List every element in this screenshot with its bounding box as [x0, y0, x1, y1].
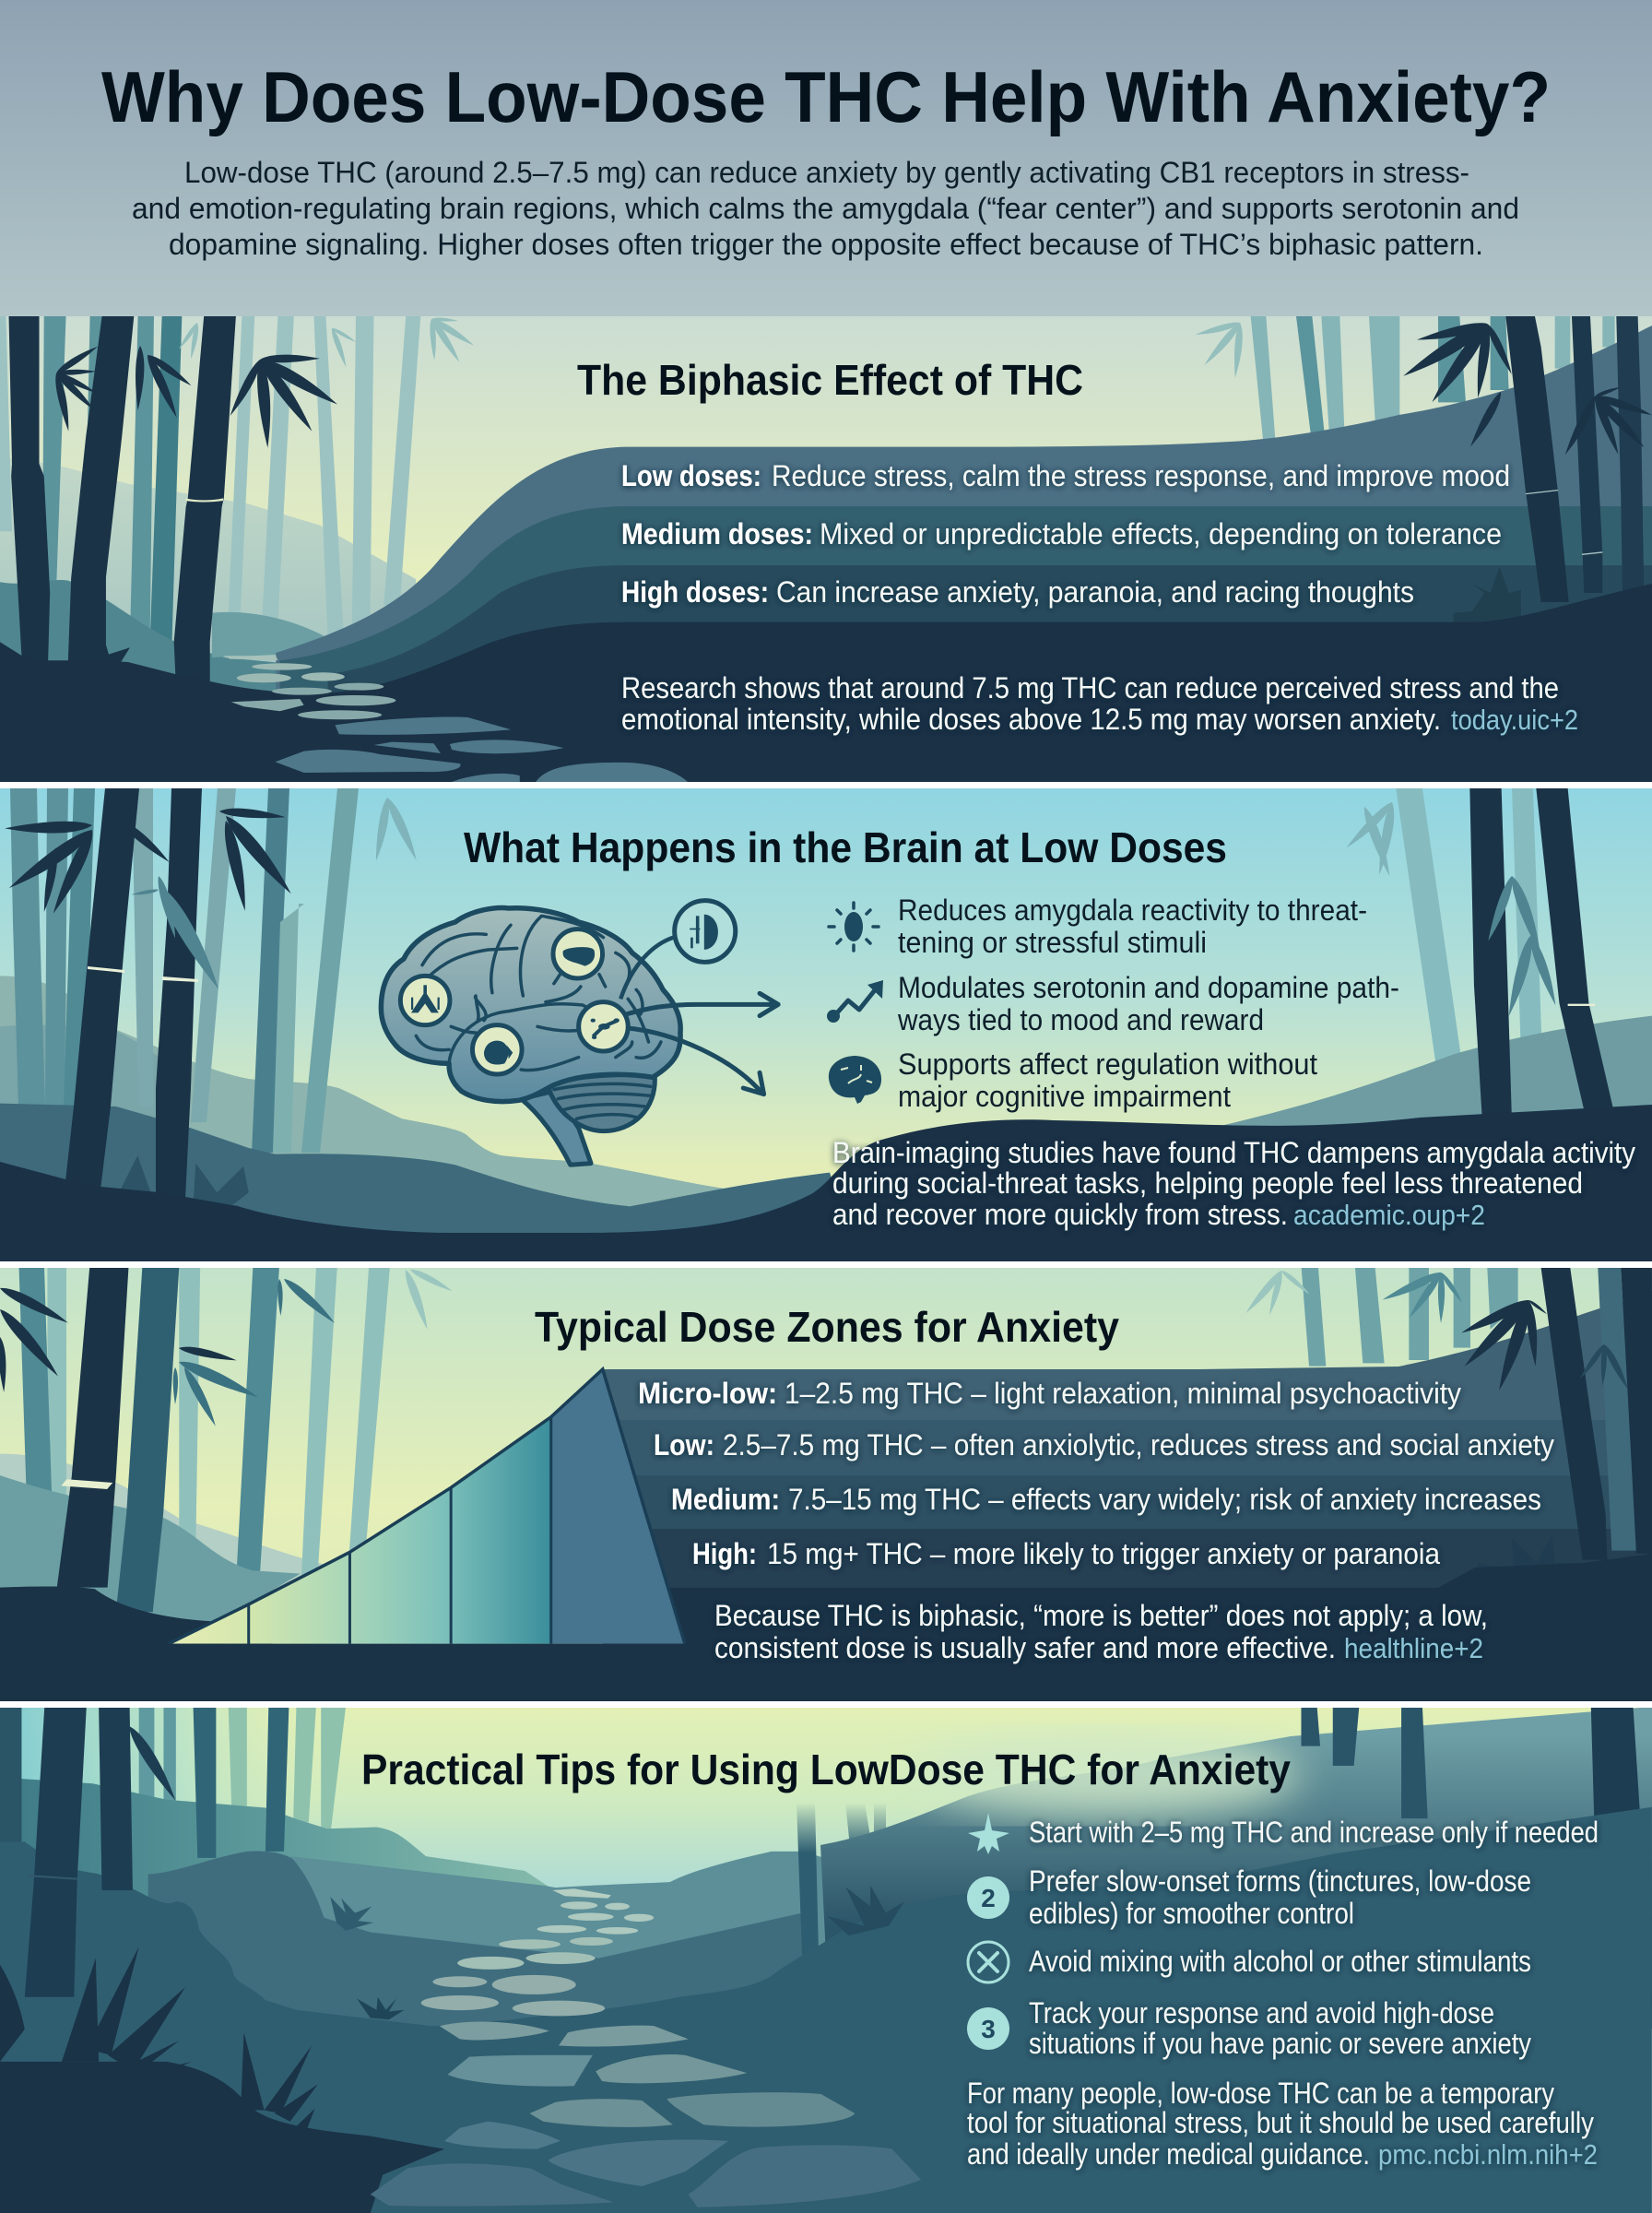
tips list: situations if you have panic or severe anxiety — [1029, 2027, 1531, 2060]
tips list: Avoid mixing with alcohol or other stimulants — [1029, 1945, 1531, 1978]
bamboo leaves — [0, 1275, 1631, 1427]
panel: biphasic effect — [0, 316, 1652, 782]
bamboo leaf — [124, 1722, 181, 1803]
dose zone list: 1–2.5 mg THC – light relaxation, minimal psychoactivity — [785, 1377, 1461, 1410]
tips list: Track your response and avoid high-dose — [1029, 1996, 1494, 2030]
intro text: dopamine signaling. Higher doses often trigger the opposite effect because of THC’s biphasic pattern. — [169, 228, 1483, 261]
icon: region markers — [400, 901, 736, 1074]
closing note: pmc.ncbi.nlm.nih+2 — [1378, 2138, 1598, 2171]
panel: dose zones — [0, 1267, 1652, 1705]
dose list: Low doses: — [621, 459, 761, 492]
icon: x mark — [968, 1942, 1009, 1982]
research note: academic.oup+2 — [1293, 1199, 1485, 1231]
dose list: Mixed or unpredictable effects, depending on tolerance — [820, 517, 1502, 550]
section heading: The Biphasic Effect of THC — [577, 356, 1083, 404]
bullet list: Reduces amygdala reactivity to threat- — [898, 893, 1367, 927]
dose list: High doses: — [621, 575, 769, 609]
note — [714, 1599, 1488, 1664]
dose zone list: 2.5–7.5 mg THC – often anxiolytic, reduces stress and social anxiety — [723, 1428, 1554, 1462]
arrow: to right — [626, 993, 778, 1016]
icon: small brain — [829, 1056, 881, 1104]
dose list: Can increase anxiety, paranoia, and racing thoughts — [776, 575, 1414, 609]
bamboo leaves — [53, 319, 1652, 457]
dose band rows — [603, 1369, 1652, 1701]
connector to outer icon — [620, 937, 676, 999]
icon: trend arrow — [827, 980, 883, 1023]
icon: number 2: 2 — [981, 1884, 996, 1912]
icon: number 3: 3 — [981, 2015, 996, 2043]
bamboo leaves: pale — [177, 316, 1244, 378]
brain illustration — [381, 901, 778, 1165]
closing note — [967, 2077, 1598, 2171]
note: healthline+2 — [1344, 1632, 1483, 1664]
bullet list: ways tied to mood and reward — [897, 1003, 1264, 1036]
bullet list: major cognitive impairment — [898, 1080, 1231, 1113]
research note: today.uic+2 — [1451, 704, 1578, 736]
closing note: For many people, low-dose THC can be a temporary — [967, 2077, 1554, 2110]
bamboo leaves — [5, 796, 1561, 1018]
section heading: Typical Dose Zones for Anxiety — [535, 1303, 1119, 1351]
dose zone list: 15 mg+ THC – more likely to trigger anxiety or paranoia — [767, 1537, 1440, 1570]
dose list: Medium doses: — [621, 517, 813, 550]
dose triangle chart — [169, 1369, 685, 1644]
bamboo leaves: teal — [402, 1267, 1464, 1331]
research note — [832, 1136, 1635, 1231]
panel: brain at low doses — [0, 788, 1652, 1261]
title: Why Does Low-Dose THC Help With Anxiety? — [101, 56, 1551, 137]
icon: number 3 — [967, 2007, 1009, 2050]
panel: header — [0, 0, 1652, 316]
dose list: Reduce stress, calm the stress response, and improve mood — [772, 459, 1510, 492]
tips list — [967, 1813, 1599, 2060]
arrow: down right — [628, 1028, 764, 1095]
section heading: What Happens in the Brain at Low Doses — [464, 823, 1227, 871]
undergrowth plants — [62, 1886, 904, 2130]
dose zone list: Micro-low: — [638, 1377, 777, 1410]
dose list — [621, 459, 1510, 609]
research note: during social-threat tasks, helping people feel less threatened — [832, 1166, 1583, 1200]
bullet list: Modulates serotonin and dopamine path- — [898, 971, 1399, 1004]
dose zone list: 7.5–15 mg THC – effects vary widely; risk of anxiety increases — [788, 1483, 1541, 1516]
intro text: and emotion-regulating brain regions, which calms the amygdala (“fear center”) and supports serotonin and — [132, 192, 1519, 225]
tips list: Prefer slow-onset forms (tinctures, low-dose — [1029, 1864, 1531, 1898]
icon: sun — [829, 903, 879, 951]
bullet list: Supports affect regulation without — [898, 1047, 1317, 1081]
icon: sprout star — [968, 1813, 1009, 1854]
research note: and recover more quickly from stress. — [832, 1198, 1288, 1231]
closing note: and ideally under medical guidance. — [967, 2137, 1370, 2171]
intro text — [132, 156, 1519, 261]
dose zone list: Medium: — [671, 1483, 780, 1516]
dark foreground stalks — [65, 788, 202, 1199]
intro text: Low-dose THC (around 2.5–7.5 mg) can reduce anxiety by gently activating CB1 receptors in stress- — [184, 156, 1469, 189]
dose zone list: High: — [692, 1537, 757, 1570]
dose zone list: Low: — [654, 1428, 714, 1462]
research note — [621, 671, 1578, 736]
icon: number 2 — [967, 1876, 1009, 1919]
bullet list — [827, 893, 1399, 1113]
note: Because THC is biphasic, “more is better” does not apply; a low, — [714, 1599, 1488, 1632]
bullet list: tening or stressful stimuli — [898, 926, 1207, 959]
panel: practical tips — [0, 1707, 1652, 2213]
stones path — [224, 656, 688, 782]
stepping stones — [371, 1888, 921, 2207]
note: consistent dose is usually safer and more effective. — [714, 1631, 1336, 1664]
research note: Research shows that around 7.5 mg THC can reduce perceived stress and the — [621, 671, 1559, 704]
research note: emotional intensity, while doses above 12.5 mg may worsen anxiety. — [621, 703, 1441, 736]
section heading: Practical Tips for Using LowDose THC for Anxiety — [361, 1746, 1291, 1793]
dose zone list — [638, 1377, 1554, 1570]
tips list: edibles) for smoother control — [1029, 1897, 1354, 1930]
